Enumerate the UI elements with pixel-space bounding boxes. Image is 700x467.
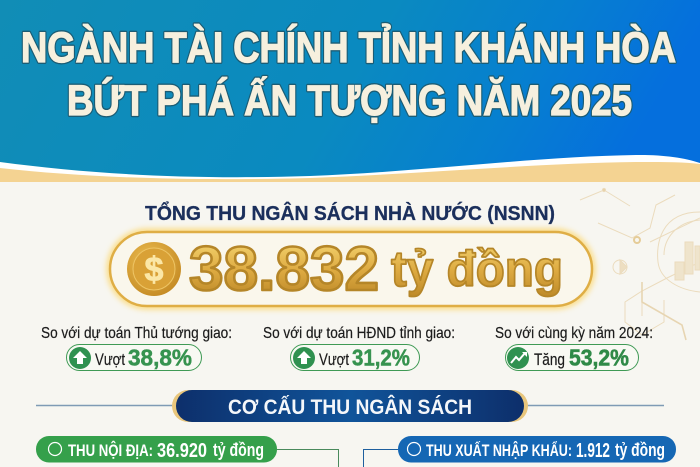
icon: gold dollar coin [127, 242, 181, 296]
comparison: same period 2024 [495, 325, 653, 370]
comparison: prime minister estimate: Vượt [95, 350, 125, 369]
section heading: revenue structure [36, 390, 664, 422]
total revenue unit: tỷ đồng [391, 241, 563, 297]
heading: total revenue: TỔNG THU NGÂN SÁCH NHÀ NƯỚC (NSNN) [145, 201, 555, 225]
domestic revenue pill: 36.920 [157, 440, 207, 462]
comparison: provincial council estimate: So với dự toán HĐND tỉnh giao: [263, 325, 455, 342]
section heading: revenue structure: CƠ CẤU THU NGÂN SÁCH [228, 395, 472, 419]
title [21, 23, 676, 125]
domestic revenue pill: THU NỘI ĐỊA: [68, 441, 153, 460]
comparison: prime minister estimate: 38,8% [128, 344, 192, 370]
domestic revenue pill [36, 436, 338, 467]
import-export revenue pill: tỷ đồng [615, 440, 665, 460]
icon: up arrow [69, 347, 91, 369]
icon: up arrow [293, 347, 315, 369]
import-export revenue pill: THU XUẤT NHẬP KHẨU: [426, 441, 572, 460]
comparison: prime minister estimate: So với dự toán Thủ tướng giao: [41, 325, 232, 342]
comparison: provincial council estimate: 31,2% [352, 344, 410, 370]
icon: growth trend [507, 347, 529, 369]
comparison: prime minister estimate [41, 325, 232, 370]
total revenue value: 38.832 [189, 235, 379, 304]
comparison: same period 2024: 53,2% [569, 344, 629, 370]
comparison: provincial council estimate [263, 325, 455, 370]
domestic revenue pill: tỷ đồng [213, 440, 264, 460]
decorative data graphic [580, 188, 700, 340]
comparison: same period 2024: Tăng [534, 350, 565, 369]
import-export revenue pill: 1.912 [576, 440, 610, 462]
comparison: provincial council estimate: Vượt [319, 350, 349, 369]
total revenue gold pill [110, 232, 592, 306]
header banner [0, 0, 700, 182]
import-export revenue pill [364, 436, 676, 467]
comparison: same period 2024: So với cùng kỳ năm 2024: [495, 325, 653, 342]
icon: gold dollar coin: $ [145, 251, 164, 289]
